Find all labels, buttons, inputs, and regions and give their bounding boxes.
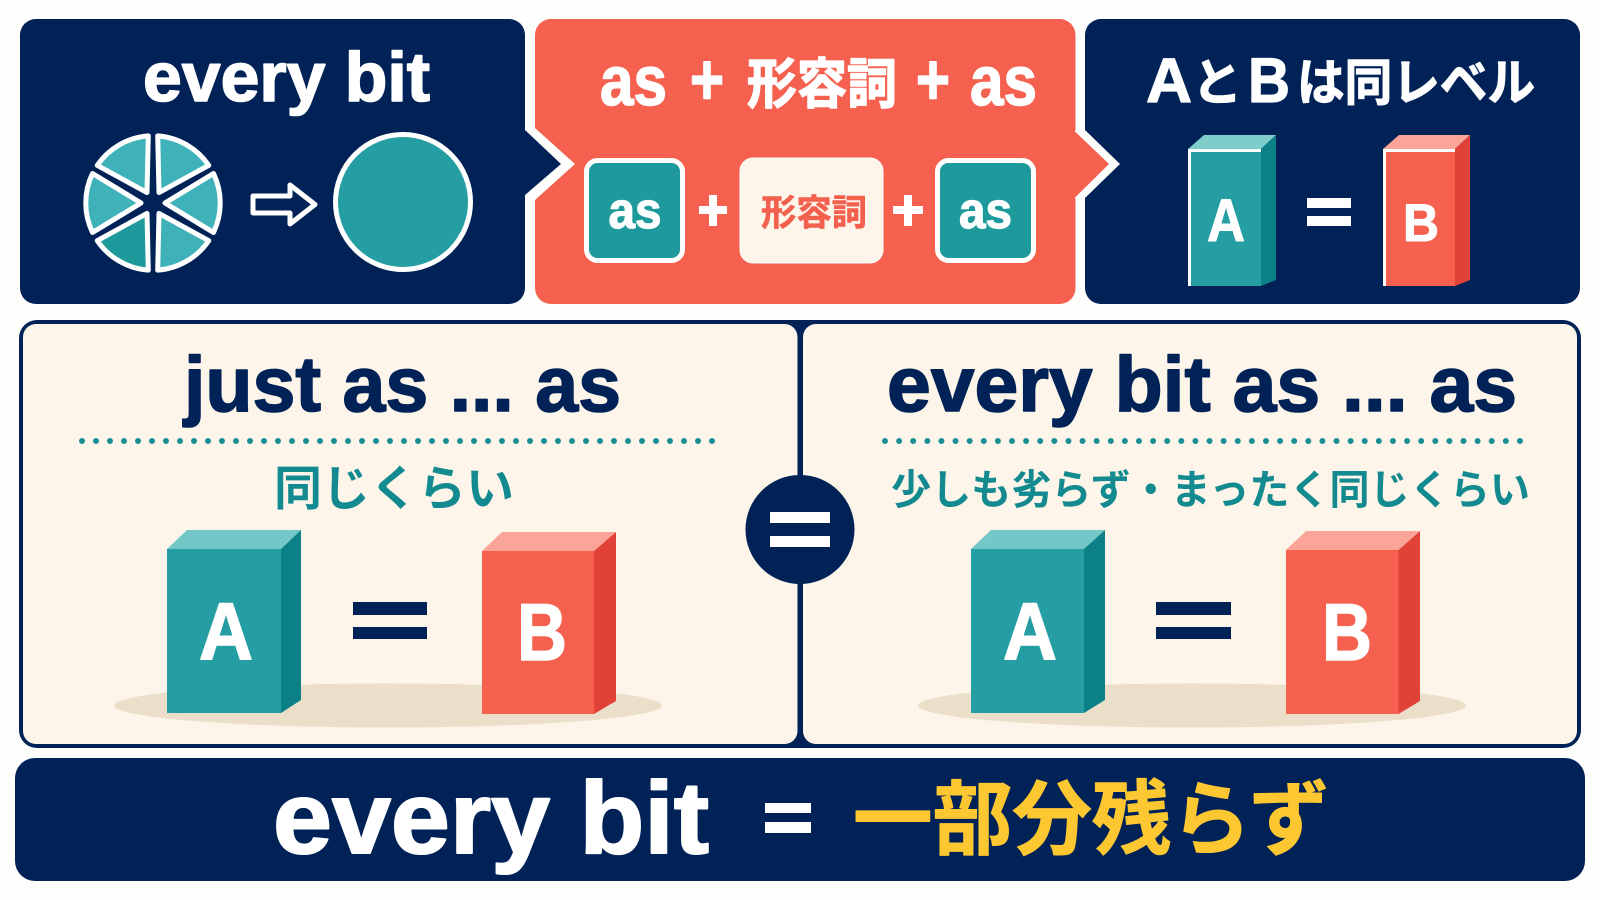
box: as (586, 160, 682, 260)
heading: A to B wa dou level: A (1146, 46, 1192, 116)
block: A: A (1207, 187, 1245, 254)
panel: every bit as ... as (803, 324, 1577, 744)
banner text: ichibubun nokorazu: 一部分残らず (853, 776, 1329, 866)
panel: A and B same level (1074, 19, 1580, 304)
block: B (1383, 135, 1470, 286)
heading: A to B wa dou level (1146, 46, 1535, 116)
box: adjective: 形容詞 (761, 192, 867, 233)
ground shadow (918, 684, 1466, 728)
panel: every bit (20, 19, 525, 304)
plus (699, 195, 727, 226)
subheading: same degree: 同じくらい (274, 463, 514, 516)
equals sign (1307, 198, 1351, 226)
banner: every bit = none left out (15, 758, 1585, 881)
heading: every bit as ... as: every bit as ... as (887, 340, 1517, 428)
heading: as + adjective + as: as (970, 42, 1037, 120)
box: adjective (740, 158, 883, 263)
chevron: center panel pointer (1074, 130, 1120, 198)
panel frame: comparison (19, 320, 1581, 748)
block: A (167, 530, 301, 713)
ground shadow (114, 684, 662, 728)
box: as: as (608, 182, 662, 239)
block: A: A (199, 587, 253, 677)
dotted divider (885, 438, 1521, 444)
block: B: B (517, 588, 567, 678)
heading: just as ... as: just as ... as (182, 340, 621, 428)
heading: A to B wa dou level: は同レベル (1297, 55, 1535, 111)
box: as (938, 160, 1034, 260)
center equals badge (746, 475, 854, 584)
heading: A to B wa dou level: B (1248, 46, 1290, 116)
banner text: every bit: every bit (273, 761, 709, 875)
panel: just as ... as (23, 324, 798, 744)
icon: whole circle (336, 134, 470, 270)
block: A (971, 530, 1105, 713)
arrow (253, 185, 315, 224)
subheading: not inferior at all: 少しも劣らず・まったく同じくらい (891, 467, 1530, 513)
heading: as + adjective + as (600, 40, 1037, 120)
box: as: as (959, 182, 1012, 239)
block: B (482, 532, 616, 714)
chevron: left panel pointer (524, 128, 575, 200)
icon: divided circle (86, 130, 220, 276)
heading: as + adjective + as: as (600, 42, 667, 120)
heading: as + adjective + as: + (690, 40, 724, 120)
dotted divider (82, 438, 713, 444)
panel: as + adjective + as (524, 19, 1076, 304)
heading: A to B wa dou level: と (1192, 55, 1242, 111)
block: B: B (1322, 588, 1372, 678)
plus (893, 195, 923, 226)
heading: as + adjective + as: 形容詞 (747, 55, 897, 115)
block: A: A (1003, 587, 1057, 677)
banner equals sign (765, 803, 811, 833)
equals sign (1156, 602, 1231, 639)
heading: every bit: every bit (143, 38, 430, 116)
heading: as + adjective + as: + (916, 40, 950, 120)
block: B: B (1403, 194, 1439, 253)
block: B (1286, 531, 1420, 714)
block: A (1188, 135, 1276, 286)
equals sign (353, 602, 427, 639)
